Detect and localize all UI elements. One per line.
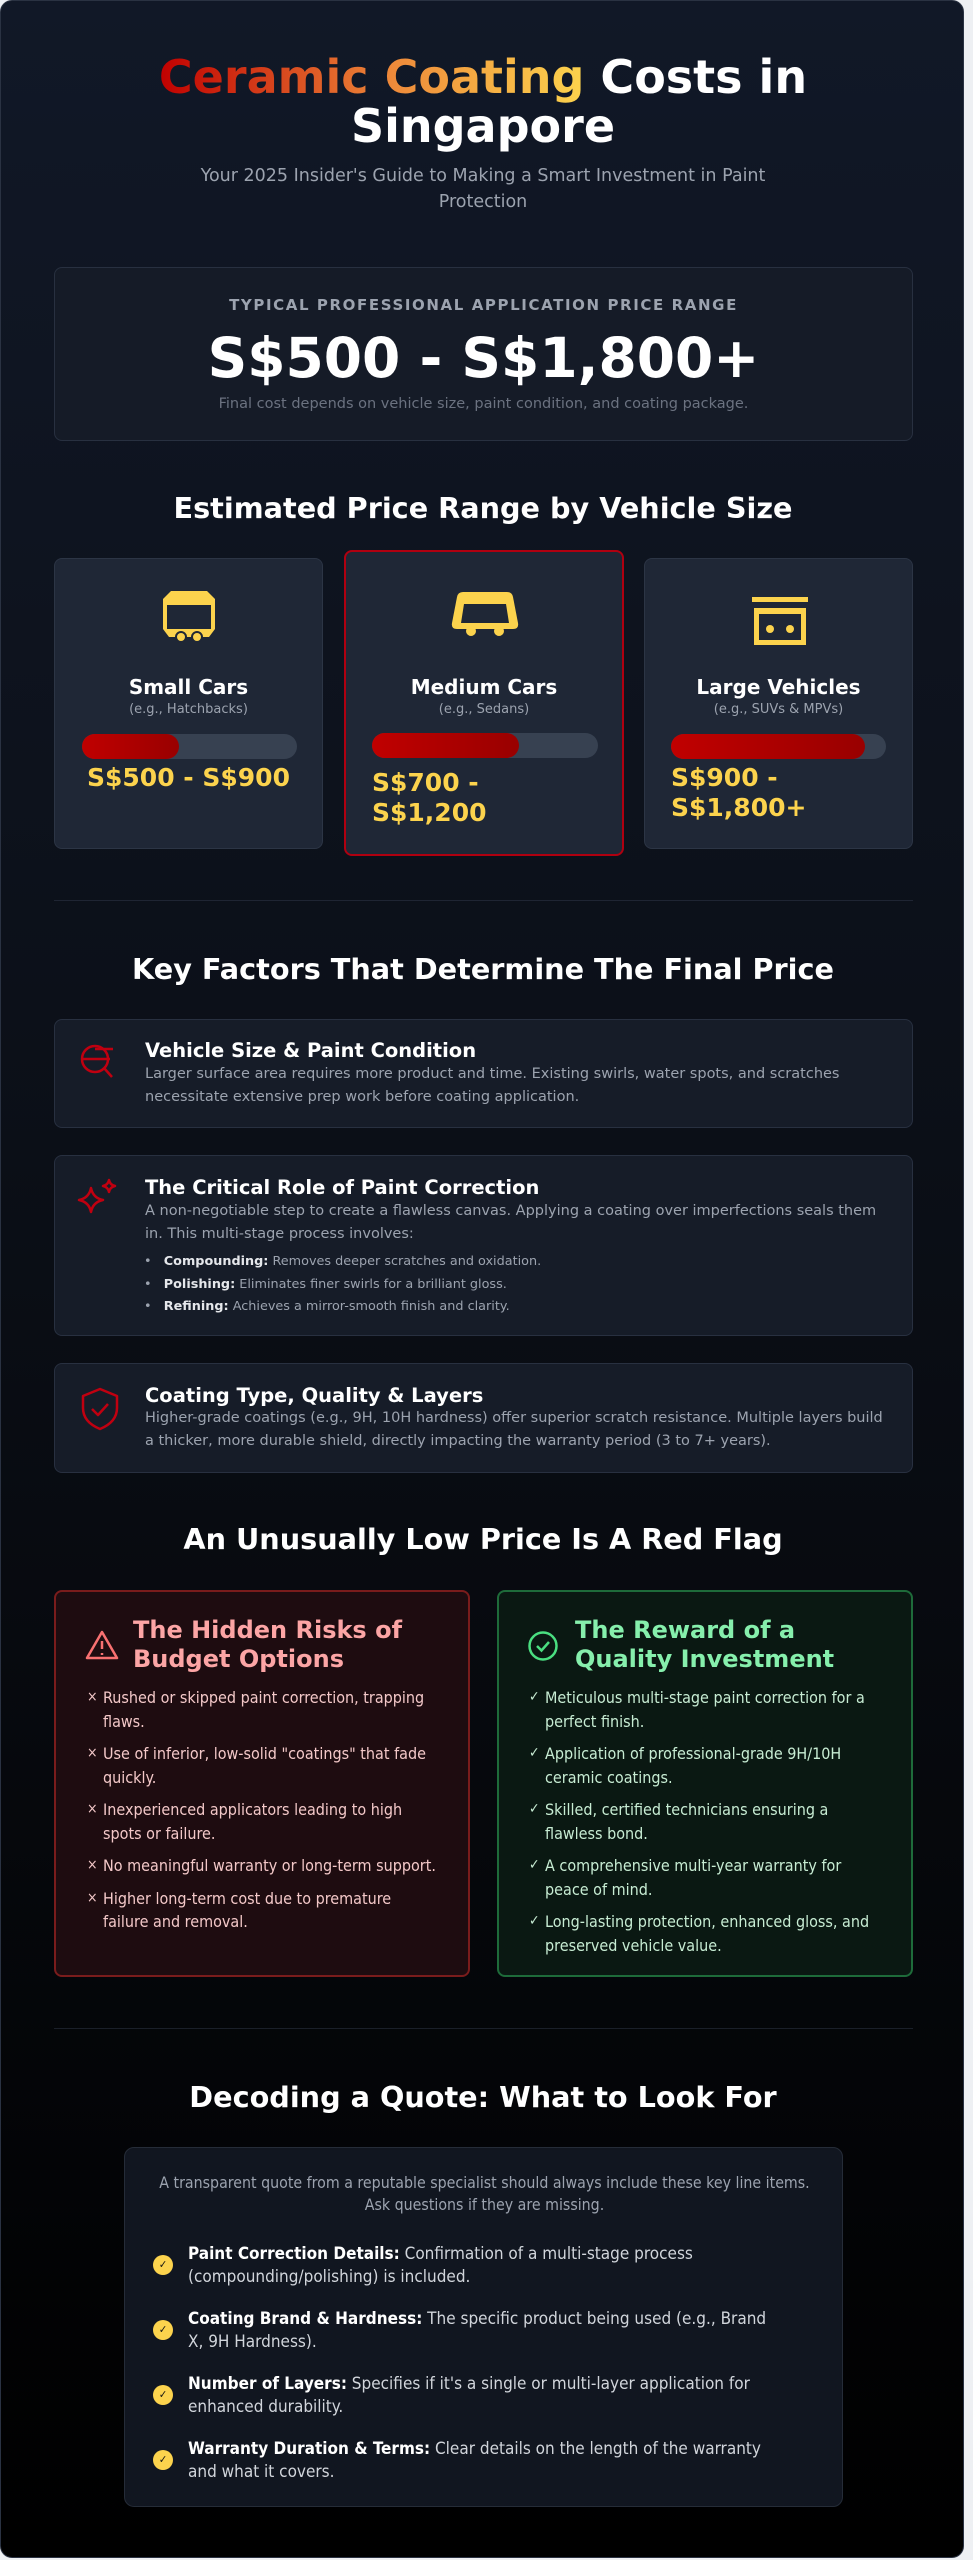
panel: quality reward: ✓ bbox=[529, 1801, 540, 1817]
bullet list: • Polishing: Eliminates finer swirls for a brilliant gloss. bbox=[144, 1276, 507, 1292]
card: large vehicles: S$1,800+ bbox=[671, 793, 806, 822]
title: Budget Options bbox=[133, 1645, 344, 1673]
checklist: Coating Brand & Hardness: The specific product being used (e.g., Brand X, 9H Hardness). bbox=[188, 2309, 766, 2352]
panel: factor coating type bbox=[54, 1363, 913, 1473]
title bbox=[159, 50, 807, 153]
bar bbox=[372, 733, 598, 758]
card: medium cars (highlighted) bbox=[344, 550, 624, 856]
panel: quality reward: ✓ bbox=[529, 1689, 540, 1705]
panel: quality reward: ✓ bbox=[529, 1745, 540, 1761]
list: rewards: Long-lasting protection, enhanced gloss, and preserved vehicle value. bbox=[545, 1912, 869, 1954]
card: small cars: (e.g., Hatchbacks) bbox=[129, 702, 248, 717]
card: large vehicles: (e.g., SUVs & MPVs) bbox=[714, 702, 843, 717]
panel: quality reward: ✓ bbox=[529, 1913, 540, 1929]
bullet list: • Refining: Achieves a mirror-smooth finish and clarity. bbox=[144, 1299, 510, 1314]
list: rewards: Meticulous multi-stage paint correction for a perfect finish. bbox=[545, 1688, 865, 1730]
list: risks: Higher long-term cost due to premature failure and removal. bbox=[103, 1888, 391, 1931]
card: medium cars (highlighted): Medium Cars bbox=[411, 675, 557, 699]
list: risks: No meaningful warranty or long-term support. bbox=[103, 1856, 436, 1875]
icon: warning bbox=[86, 1630, 118, 1660]
panel: hidden risks: × bbox=[87, 1689, 98, 1705]
title: The Reward of a bbox=[575, 1616, 795, 1644]
subtitle: Protection bbox=[439, 192, 527, 212]
panel: quote checklist bbox=[124, 2147, 843, 2507]
subtitle bbox=[200, 166, 765, 212]
panel: hidden risks: × bbox=[87, 1890, 98, 1906]
panel: hidden risks: × bbox=[87, 1745, 98, 1761]
list: rewards: Application of professional-grade 9H/10H ceramic coatings. bbox=[545, 1744, 841, 1786]
icon: large vehicle bbox=[752, 597, 808, 645]
card: large vehicles: Large Vehicles bbox=[696, 675, 861, 699]
checklist: Warranty Duration & Terms: Clear details on the length of the warranty and what it covers. bbox=[188, 2439, 761, 2482]
bullet list bbox=[144, 1254, 541, 1314]
panel: hidden risks: × bbox=[87, 1801, 98, 1817]
panel: hidden risks: × bbox=[87, 1857, 98, 1873]
card: small cars bbox=[54, 558, 323, 849]
title: Singapore bbox=[351, 99, 615, 153]
list: risks: Use of inferior, low-solid "coatings" that fade quickly. bbox=[103, 1744, 426, 1786]
bar bbox=[82, 734, 297, 759]
price note: Final cost depends on vehicle size, paint condition, and coating package. bbox=[219, 396, 748, 412]
panel: factor paint correction bbox=[54, 1155, 913, 1336]
card: small cars: Small Cars bbox=[129, 675, 248, 699]
title: The Hidden Risks of bbox=[133, 1616, 402, 1644]
list: rewards: Skilled, certified technicians ensuring a flawless bond. bbox=[545, 1800, 828, 1842]
icon: medium car bbox=[452, 592, 518, 636]
panel: quote checklist: ✓ bbox=[159, 2388, 167, 2401]
panel: quality reward bbox=[497, 1590, 913, 1977]
title: Ceramic Coating Costs in bbox=[159, 50, 807, 104]
panel: quote checklist: ✓ bbox=[159, 2258, 167, 2271]
checklist: Number of Layers: Specifies if it's a single or multi-layer application for enhanced durability. bbox=[188, 2374, 750, 2417]
icon: sparkles bbox=[78, 1178, 116, 1214]
price label: TYPICAL PROFESSIONAL APPLICATION PRICE RANGE bbox=[229, 296, 738, 314]
panel: factor vehicle size bbox=[54, 1019, 913, 1128]
card: medium cars (highlighted): (e.g., Sedans) bbox=[439, 702, 529, 717]
heading: decoding a quote: Decoding a Quote: What to Look For bbox=[189, 2080, 777, 2114]
list: rewards bbox=[529, 1688, 869, 1954]
card: large vehicles bbox=[644, 558, 913, 849]
heading: red flag: An Unusually Low Price Is A Red Flag bbox=[183, 1522, 783, 1556]
panel: factor vehicle size: Vehicle Size & Paint Condition bbox=[145, 1039, 476, 1062]
subtitle: Your 2025 Insider's Guide to Making a Smart Investment in Paint bbox=[201, 166, 765, 186]
card: large vehicles: S$900 - bbox=[671, 763, 778, 792]
title bbox=[133, 1616, 402, 1673]
panel: factor paint correction: A non-negotiable step to create a flawless canvas. Applying a coating over imperfections seals them in. This multi-stage process involves: bbox=[145, 1203, 876, 1242]
list: risks: Inexperienced applicators leading to high spots or failure. bbox=[103, 1800, 402, 1842]
panel: factor vehicle size: Larger surface area requires more product and time. Existing swirls, water spots, and scratches necessitate extensive prep work before coating application. bbox=[145, 1066, 839, 1104]
icon: check circle bbox=[528, 1631, 558, 1661]
panel: quality reward: ✓ bbox=[529, 1857, 540, 1873]
bar bbox=[671, 734, 886, 759]
panel: factor paint correction: The Critical Role of Paint Correction bbox=[145, 1176, 539, 1199]
panel: quote checklist: ✓ bbox=[159, 2453, 167, 2466]
heading: price by vehicle size: Estimated Price Range by Vehicle Size bbox=[174, 491, 792, 525]
big price: S$500 - S$1,800+ bbox=[208, 326, 759, 390]
checklist bbox=[153, 2244, 766, 2482]
title bbox=[575, 1616, 834, 1673]
checklist: Paint Correction Details: Confirmation of a multi-stage process (compounding/polishing) is included. bbox=[188, 2244, 693, 2287]
icon: small car bbox=[163, 591, 215, 641]
title: Quality Investment bbox=[575, 1645, 834, 1673]
panel: quote checklist: ✓ bbox=[159, 2323, 167, 2336]
bullet list: • Compounding: Removes deeper scratches and oxidation. bbox=[144, 1254, 541, 1269]
card: small cars: S$500 - S$900 bbox=[87, 763, 290, 792]
intro text: A transparent quote from a reputable specialist should always include these key line items. Ask questions if they are missing. bbox=[159, 2173, 810, 2214]
panel: hidden risks bbox=[54, 1590, 470, 1977]
list: rewards: A comprehensive multi-year warranty for peace of mind. bbox=[545, 1856, 841, 1898]
icon: shield bbox=[82, 1388, 118, 1430]
card: medium cars (highlighted): S$700 - bbox=[372, 768, 479, 797]
panel: factor coating type: Coating Type, Quality & Layers bbox=[145, 1384, 483, 1407]
panel: typical price range bbox=[54, 267, 913, 441]
list: risks: Rushed or skipped paint correction, trapping flaws. bbox=[103, 1688, 424, 1730]
list: risks bbox=[87, 1688, 436, 1931]
card: medium cars (highlighted): S$1,200 bbox=[372, 798, 486, 827]
panel: factor coating type: Higher-grade coatings (e.g., 9H, 10H hardness) offer superior scratch resistance. Multiple layers build a thicker, more durable shield, directly impacting the warranty period (3 to 7+ years). bbox=[145, 1410, 883, 1448]
icon: magnifier bbox=[80, 1044, 113, 1078]
heading: key factors: Key Factors That Determine The Final Price bbox=[132, 952, 834, 986]
